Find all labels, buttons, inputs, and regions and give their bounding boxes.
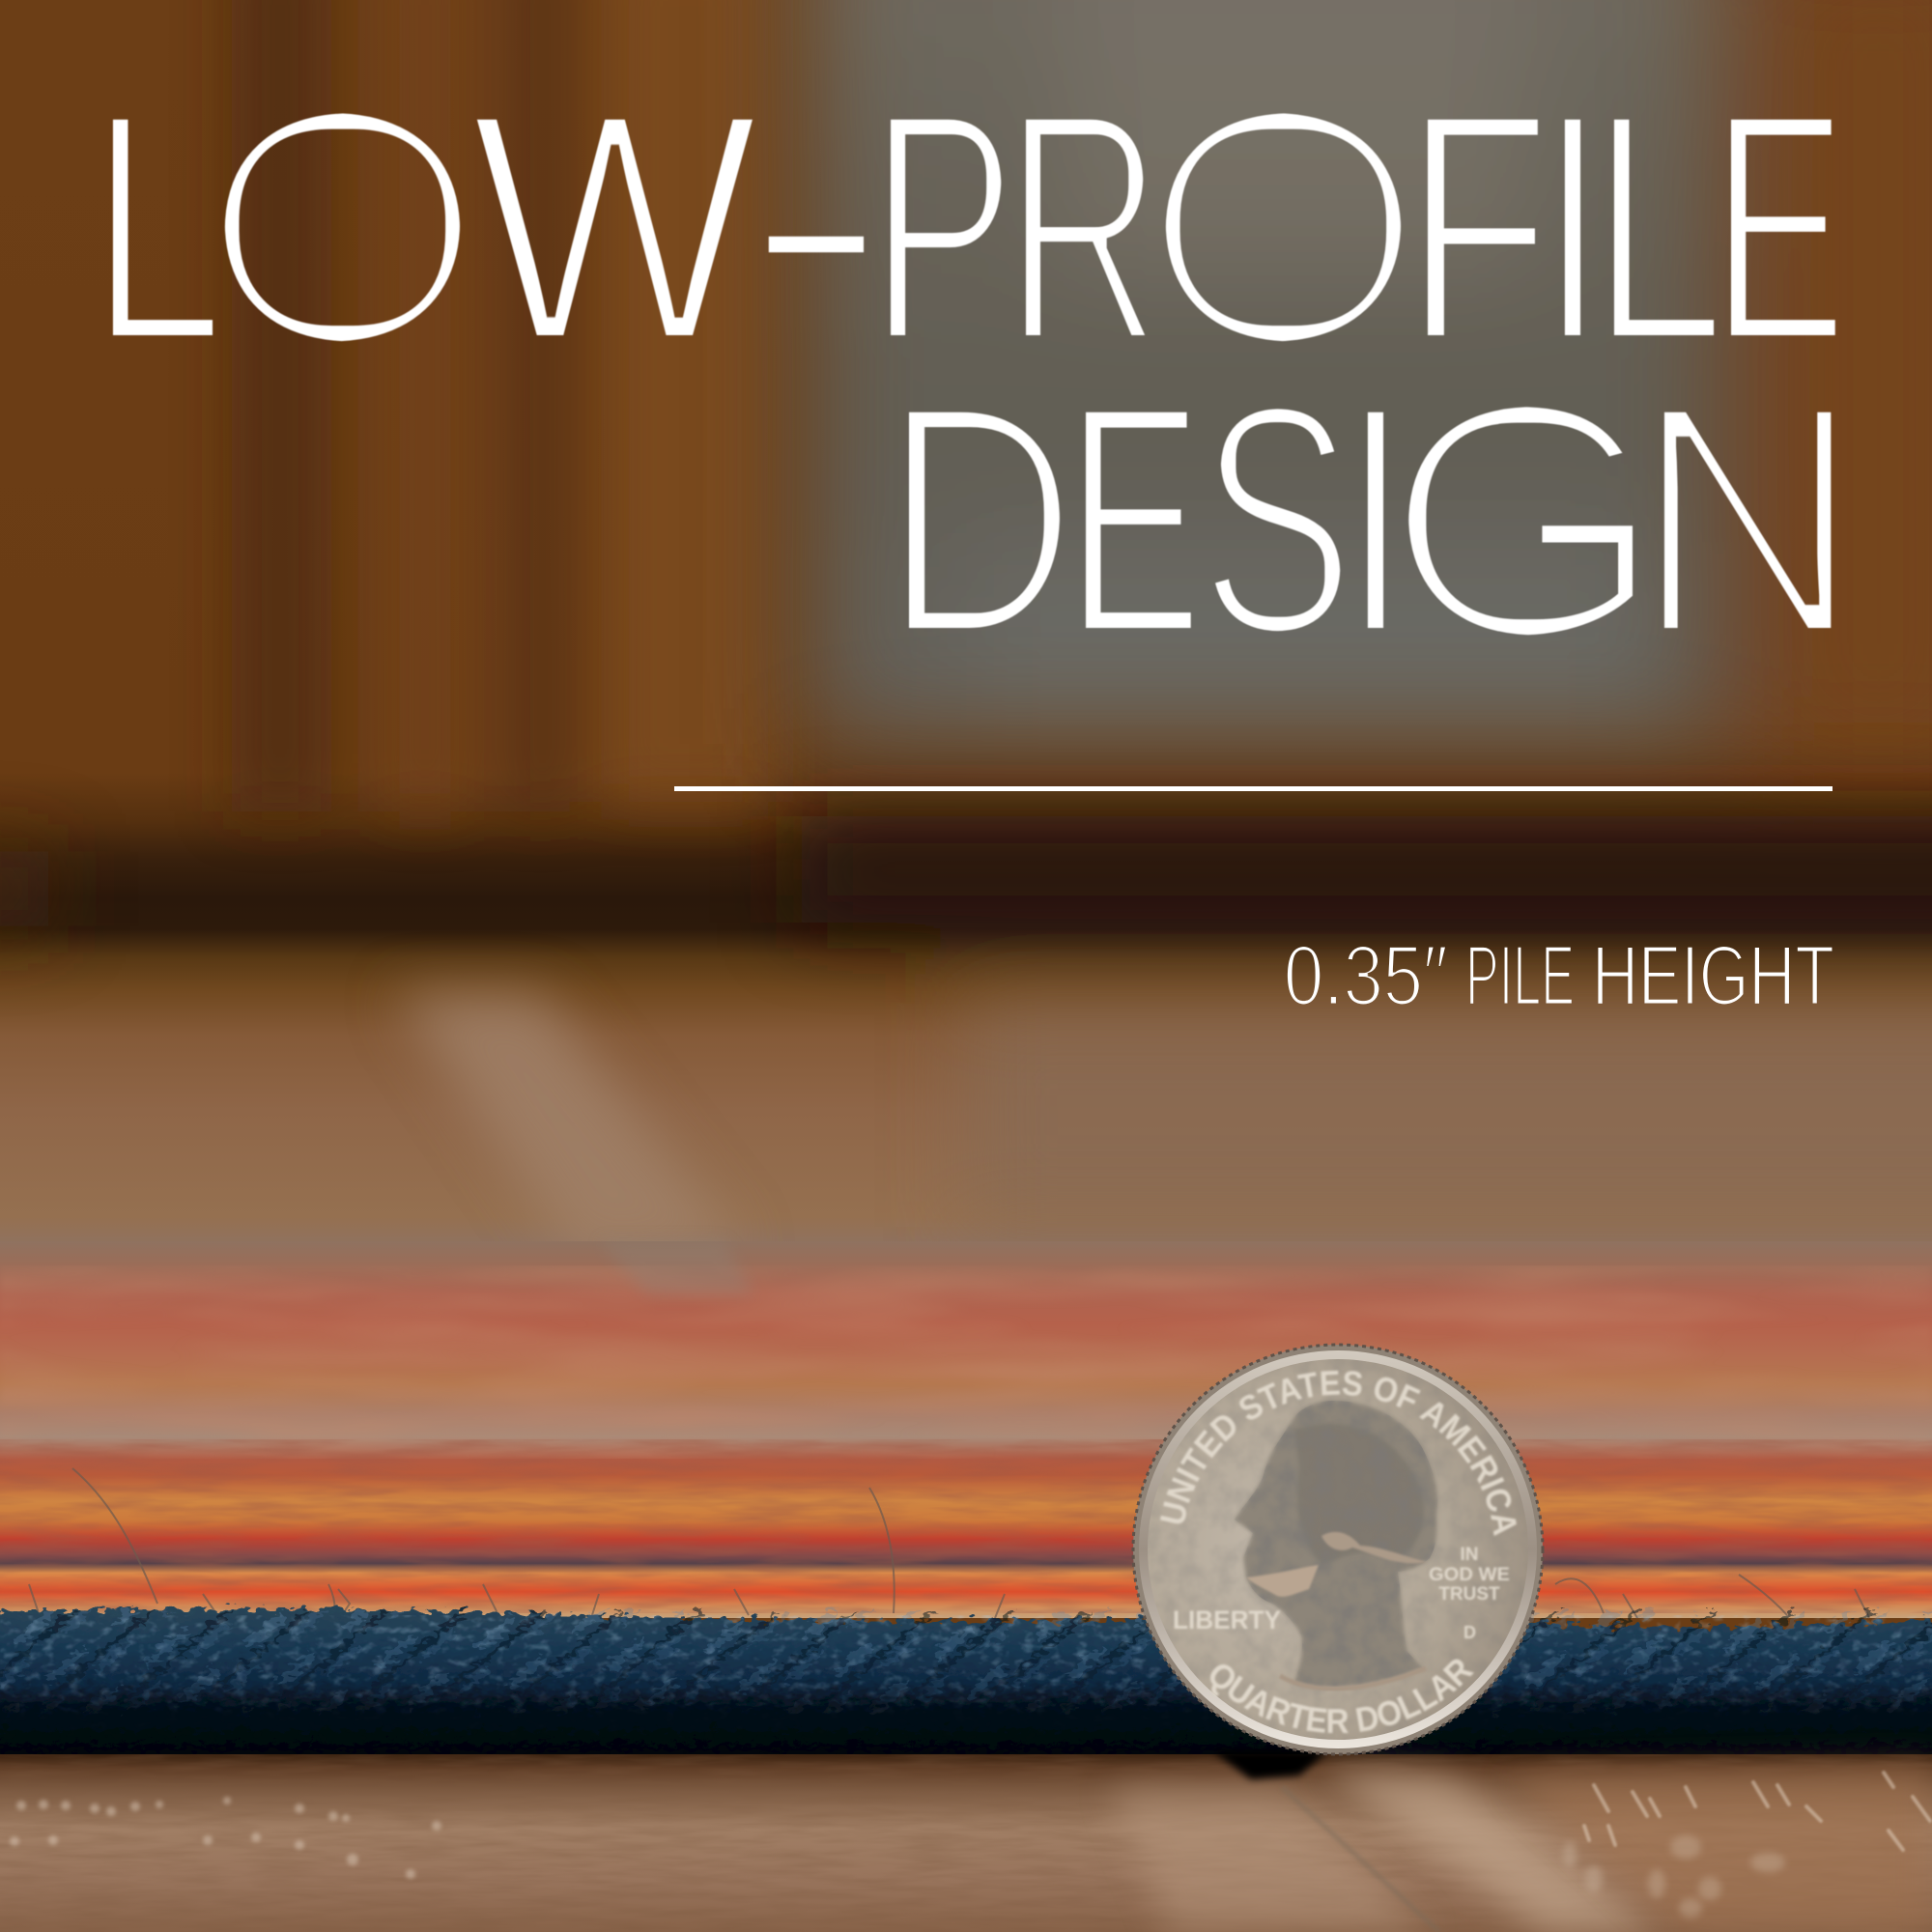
coin shadow on the floor [1212,1750,1328,1779]
title line one: I [1541,44,1605,411]
title line one: P [869,44,1015,411]
title line one: F [1406,43,1550,410]
title line two [882,333,1863,708]
subtitle: pile height: 0.35″ [1284,927,1448,1023]
coin lettering: LIBERTY: LIBERTY [1173,1605,1281,1634]
coin lettering: UNITED STATES OF AMERICA: UNITED STATES OF AMERICA [1159,1370,1518,1536]
coin mint mark: D [1463,1623,1476,1642]
light plank band [1321,1768,1662,1932]
speckled highlights [10,1797,441,1879]
rug fibres [29,1468,1869,1623]
coin lettering: IN GOD WE TRUST: TRUST [1438,1584,1500,1605]
plank seam [1282,1787,1439,1932]
title line two: E [1067,336,1202,702]
rug edge: dark blue braided rope [0,1609,1932,1758]
floorboards in the foreground [0,1754,1932,1932]
title line one: R [1006,44,1162,410]
title line one: E [1713,44,1846,411]
title line one: L [89,45,224,411]
title line two: G [1381,333,1669,708]
subtitle: pile height: HEIGHT [1592,927,1834,1023]
title line one [89,35,1846,414]
light plank beside the coin [1111,1787,1430,1932]
coin reeded edge [1133,1345,1543,1754]
coin surface wear [1140,1352,1536,1748]
right floor tone [1507,1768,1932,1932]
slanted highlights on the right [1584,1773,1930,1850]
coin portrait [1235,1399,1439,1690]
coin lettering: IN GOD WE TRUST [1429,1545,1510,1605]
title line two: S [1200,338,1353,703]
coin rim [1139,1350,1537,1748]
rug: blurred striped surface [0,1241,1932,1623]
coin lettering: IN GOD WE TRUST: GOD WE [1429,1565,1510,1585]
title line two: D [882,336,1077,702]
title line two: I [1344,337,1407,703]
title line one: W [469,43,763,410]
title line one: - [748,35,885,401]
title line one: O [1137,40,1430,414]
coin lettering: QUARTER DOLLAR: QUARTER DOLLAR [1209,1658,1474,1734]
coin lettering: IN GOD WE TRUST: IN [1461,1545,1478,1565]
divider rule [674,786,1833,791]
coin field [1148,1359,1528,1740]
title [89,35,1863,708]
subtitle: pile height [1284,927,1834,1023]
background: blurred room wall, window and floor [0,0,1932,1294]
title line two: N [1632,338,1863,703]
quarter dollar coin [1132,1343,1544,1756]
title line one: O [196,40,489,414]
subtitle: pile height: PILE [1465,927,1575,1023]
title line one: L [1590,45,1725,411]
